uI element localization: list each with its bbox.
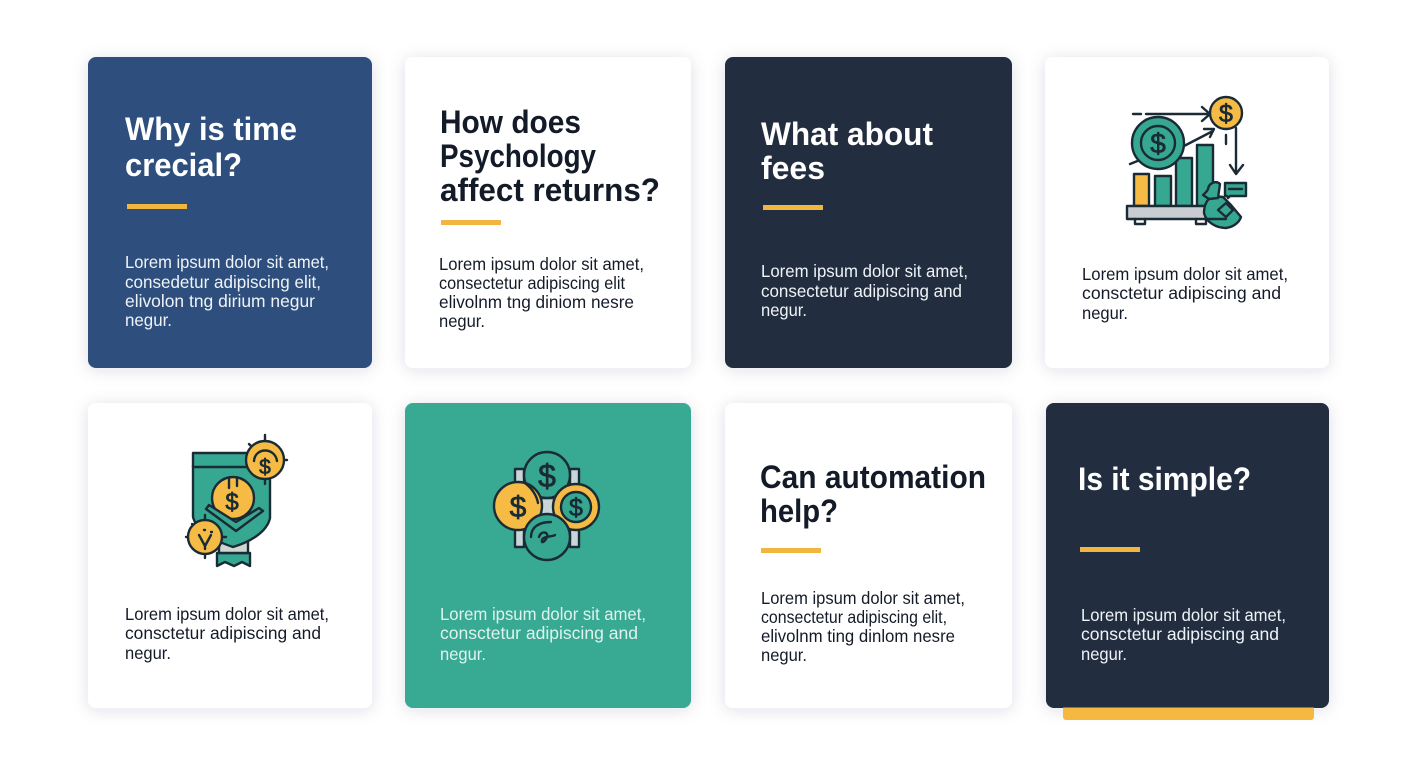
heading: how does psychology: [440, 104, 660, 208]
icon: shield with coins: [186, 435, 287, 566]
body text: [761, 261, 968, 320]
body text: consectetur adipiscing elit,: [761, 607, 947, 627]
yellow tab under card: [1063, 708, 1314, 720]
card: is it simple: [1046, 403, 1329, 720]
body text: elivolnm tng diniom nesre: [439, 292, 634, 312]
body text: Lorem ipsum dolor sit amet,: [761, 261, 968, 281]
accent bar: [763, 205, 823, 210]
body text: [125, 604, 329, 663]
heading: what about fees: What about: [761, 116, 933, 152]
heading: can automation help: help?: [760, 493, 838, 529]
body text: negur.: [439, 311, 485, 331]
icon: four linked coins: $: [538, 458, 556, 494]
body text: negur.: [440, 644, 486, 664]
heading: what about fees: [761, 116, 933, 186]
body text: elivolnm ting dinlom nesre: [761, 626, 955, 646]
card: shield icon: [88, 403, 372, 708]
card: growth chart icon: [1045, 57, 1329, 368]
body text: [439, 254, 644, 331]
heading: can automation help: Can automation: [760, 459, 986, 495]
heading: why is time crecial: Why is time: [125, 111, 297, 147]
body text: Lorem ipsum dolor sit amet,: [1082, 264, 1288, 284]
body text: Lorem ipsum dolor sit amet,: [761, 588, 965, 608]
body text: Lorem ipsum dolor sit amet,: [440, 604, 646, 624]
card: why is time crucial: [88, 57, 372, 368]
body text: [125, 252, 329, 330]
icon: shield with coins: $: [259, 456, 271, 479]
card: what about fees: [725, 57, 1012, 368]
body text: consectetur adipiscing elit: [439, 273, 625, 293]
body text: Lorem ipsum dolor sit amet,: [439, 254, 644, 274]
body text: consctetur adipiscing and: [125, 623, 321, 643]
icon: bar chart with coins: $: [1150, 128, 1166, 159]
body text: consctetur adipiscing and: [1082, 283, 1281, 303]
body text: consedetur adipiscing elit,: [125, 272, 321, 292]
body text: Lorem ipsum dolor sit amet,: [125, 604, 329, 624]
body text: negur.: [761, 645, 807, 665]
heading: how does psychology: affect returns?: [440, 172, 660, 208]
card: can automation help: [725, 403, 1012, 708]
body text: [761, 588, 965, 665]
body text: negur.: [761, 300, 807, 320]
icon: four linked coins: $: [569, 494, 583, 522]
body text: negur.: [1082, 303, 1128, 323]
accent bar: [1080, 547, 1140, 552]
body text: consctetur adipiscing and: [440, 623, 638, 643]
heading: can automation help: [760, 459, 986, 529]
body text: consctetur adipiscing and: [1081, 624, 1279, 644]
heading: what about fees: fees: [761, 150, 825, 186]
body text: [1082, 264, 1288, 323]
accent bar: [127, 204, 187, 209]
heading: how does psychology: Psychology: [440, 138, 596, 174]
body text: negur.: [125, 310, 172, 330]
accent bar: [761, 548, 821, 553]
accent bar: [441, 220, 501, 225]
body text: [1081, 605, 1286, 664]
body text: negur.: [125, 643, 171, 663]
body text: Lorem ipsum dolor sit amet,: [125, 252, 329, 272]
heading: why is time crecial: crecial?: [125, 147, 242, 183]
body text: [440, 604, 646, 664]
icon: shield with coins: $: [225, 489, 239, 516]
body text: Lorem ipsum dolor sit amet,: [1081, 605, 1286, 625]
body text: elivolon tng dirium negur: [125, 291, 315, 311]
icon: bar chart with coins: $: [1219, 100, 1233, 128]
card: teal coins icon: [405, 403, 691, 708]
body text: consectetur adipiscing and: [761, 281, 962, 301]
heading: is it simple: Is it simple?: [1078, 461, 1251, 497]
icon: four linked coins: $: [510, 491, 527, 524]
body text: negur.: [1081, 644, 1127, 664]
icon: bar chart with coins: [1127, 97, 1246, 228]
card: how does psychology affect returns: [405, 57, 691, 368]
heading: how does psychology: How does: [440, 104, 581, 140]
heading: why is time crecial: [125, 111, 297, 183]
icon: four linked coins: [494, 452, 599, 560]
